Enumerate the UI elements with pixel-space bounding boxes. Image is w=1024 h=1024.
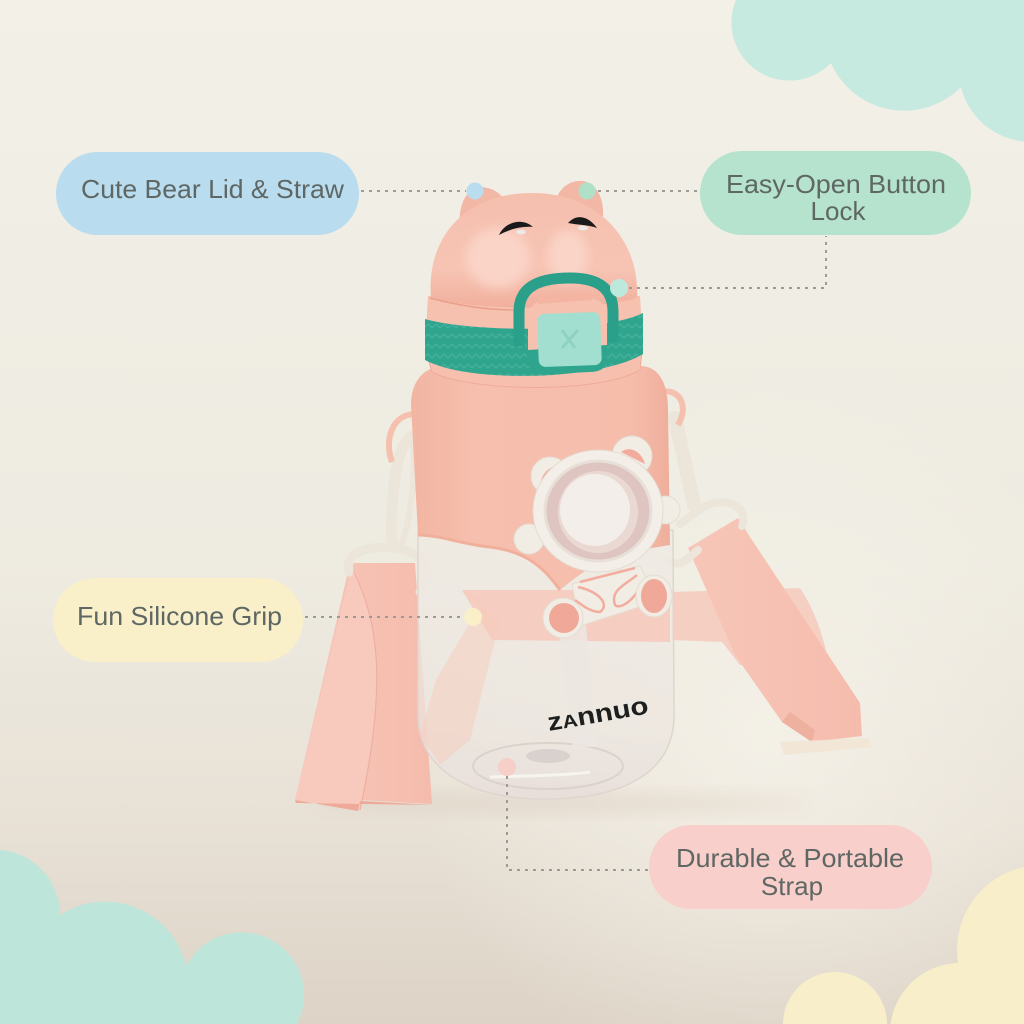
bear belly lines	[575, 568, 642, 612]
brand logo: zAnnuo	[545, 692, 650, 737]
bear silicone grip	[514, 436, 680, 638]
left loop on bottle	[389, 414, 414, 462]
bear ears and bumps	[514, 436, 680, 554]
back strap seen behind bottle	[672, 588, 830, 670]
bear feet	[543, 575, 672, 638]
cloud: top right	[731, 0, 1024, 142]
clear bottle lower body	[418, 530, 674, 799]
straw	[558, 625, 597, 747]
collar below band	[429, 352, 642, 388]
bear ring	[533, 450, 663, 572]
teal button frame	[519, 278, 613, 374]
label: easy-open button lock: Easy-Open Button	[726, 169, 946, 199]
bear body	[572, 566, 652, 626]
marker dots	[464, 182, 628, 776]
left strap	[295, 563, 432, 811]
label: fun silicone grip: Fun Silicone Grip	[77, 601, 282, 631]
label: easy-open button lock	[700, 151, 971, 235]
right clip	[670, 418, 743, 564]
label: cute bear lid and straw	[56, 152, 359, 235]
dome	[431, 193, 637, 308]
eyes	[499, 217, 597, 235]
right loop on bottle	[662, 391, 683, 425]
dome highlights	[466, 228, 588, 288]
label: durable and portable strap: Strap	[761, 871, 823, 901]
cloud: bottom left	[0, 850, 304, 1024]
ears	[460, 181, 603, 236]
leader lines	[305, 191, 826, 870]
label: durable and portable strap: Durable & Portable	[676, 843, 904, 873]
label: easy-open button lock: Lock	[811, 196, 866, 226]
left clip	[349, 436, 427, 592]
pink body upper	[411, 366, 670, 590]
right strap	[688, 518, 862, 742]
lid collar	[426, 296, 642, 330]
label: fun silicone grip	[53, 578, 303, 662]
cloud: bottom right	[783, 867, 1024, 1024]
strap buckle slider	[780, 738, 872, 755]
teal grip band	[425, 313, 643, 376]
lid seam	[430, 298, 515, 310]
bottle shadow	[310, 794, 810, 812]
label: durable and portable strap	[649, 825, 932, 909]
label: cute bear lid and straw: Cute Bear Lid & Straw	[81, 174, 344, 204]
